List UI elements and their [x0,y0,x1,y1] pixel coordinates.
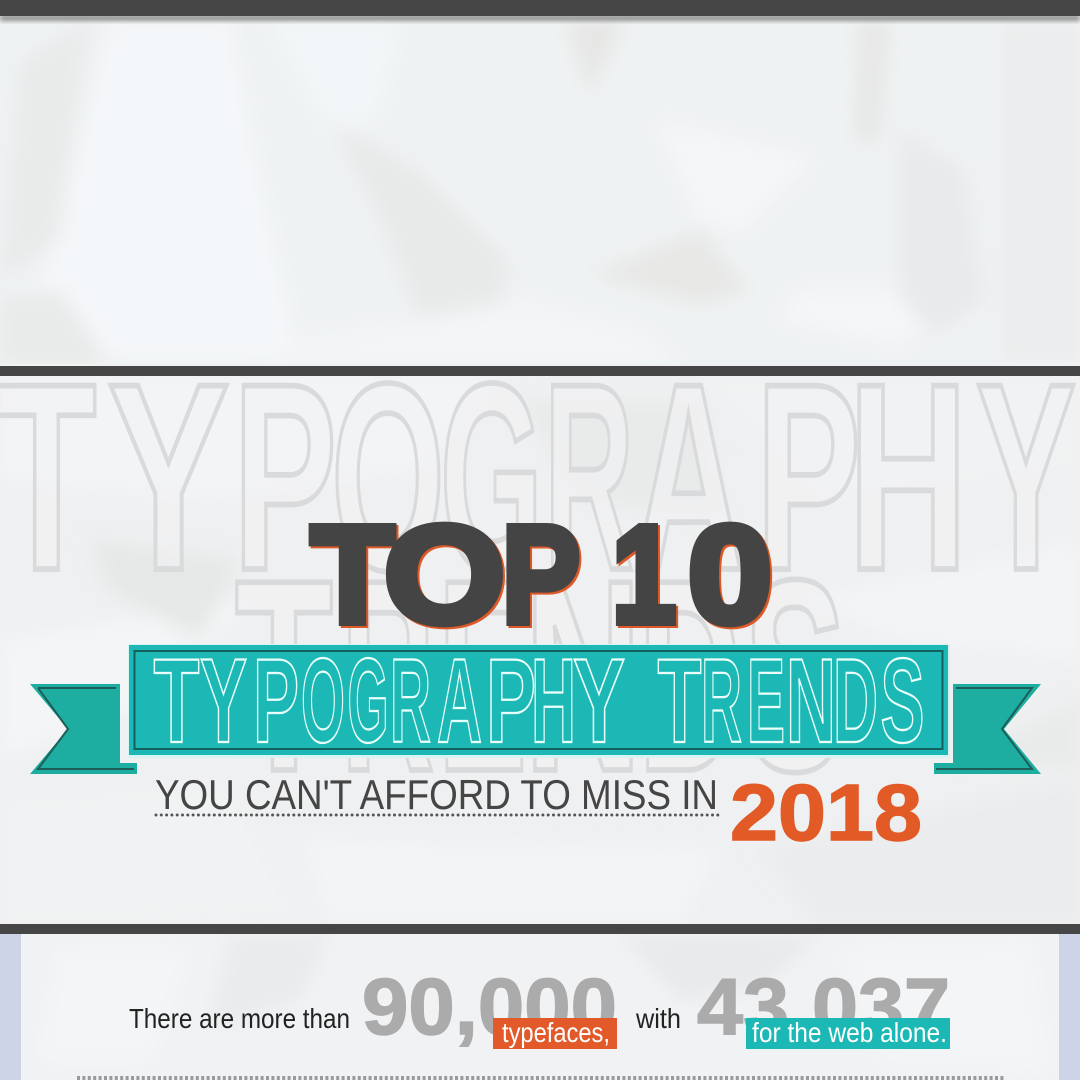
big number: 90,000: 90,000 [362,962,617,1051]
banner heading: Typography Trends: P [253,635,299,768]
banner heading: Typography Trends: S [880,635,924,768]
banner heading: Typography Trends: R [390,635,431,768]
title: TOP 10: 1 [614,500,678,654]
left lavender side strip [0,934,21,1080]
ghost background word: TYPOGRAPHY [0,329,1076,626]
ghost background word: TRENDS: S [744,524,846,829]
panel: title section background [104,549,226,623]
title: TOP 10: 0 [688,498,772,652]
ghost background word: TYPOGRAPHY: Y [976,329,1076,626]
banner heading: Typography Trends: D [833,635,878,768]
banner heading: Typography Trends: N [786,635,836,768]
title: TOP 10: T [313,500,396,654]
banner heading: Typography Trends: O [301,635,345,768]
subtitle: You can't afford to miss in: YOU CAN'T AFFORD TO MISS IN [155,771,718,818]
panel: empty crumpled paper header [574,24,883,298]
label: typefaces: typefaces, [502,1017,610,1048]
banner heading: Typography Trends: Y [573,635,625,768]
ghost background word: TYPOGRAPHY: A [633,329,744,626]
banner heading: Typography Trends: R [701,635,742,768]
banner heading: Typography Trends: E [747,635,785,768]
title: TOP 10: O [386,500,507,654]
text: with: with [635,1003,681,1034]
title: TOP 10: 1 [612,498,676,652]
lower divider bar [0,924,1080,934]
ghost background word: TYPOGRAPHY: G [440,329,543,626]
banner heading: Typography Trends: T [658,635,701,768]
statistic sentence: typefaces [129,962,950,1051]
ghost background word: TRENDS [235,524,846,829]
ribbon tail: right [934,684,1041,774]
banner heading: Typography Trends: A [437,635,482,768]
top divider bar [0,0,1080,21]
title: TOP 10: O [384,498,505,652]
banner heading: Typography Trends: P [486,635,536,768]
title: TOP 10: T [311,498,394,652]
ghost background word: TYPOGRAPHY: O [331,329,445,626]
banner: teal title box [128,635,950,768]
title: TOP 10: P [504,500,582,654]
ghost background word: TRENDS: N [524,524,642,829]
panel: statistic section background [20,934,1060,1080]
title: TOP 10: 0 [690,500,774,654]
middle divider bar [0,366,1080,376]
banner heading: Typography Trends: H [531,635,576,768]
banner heading: Typography Trends: Y [200,635,247,768]
ghost background word: TRENDS: D [638,524,742,829]
ghost background word: TYPOGRAPHY: R [544,329,634,626]
ribbon tail: left [30,684,137,774]
year: 2018: 2018 [730,768,922,857]
ghost background word: TRENDS: T [235,524,333,829]
right lavender side strip [1059,934,1080,1080]
title: TOP 10 [311,498,774,654]
ghost background word: TRENDS: E [438,524,527,829]
title: TOP 10: P [502,498,580,652]
ghost background word: TYPOGRAPHY: Y [107,329,229,626]
banner heading: Typography Trends: G [347,635,388,768]
banner heading: Typography Trends: T [154,635,199,768]
big number: 43,037: 43,037 [697,962,950,1051]
text: there are more than: There are more than [129,1003,350,1034]
banner heading: Typography Trends [154,635,924,768]
ghost background word: TYPOGRAPHY: P [756,329,861,626]
dotted divider [77,1076,1005,1080]
ghost background word: TRENDS: R [341,524,434,829]
label: for the web alone: for the web alone. [752,1017,947,1048]
ghost background word: TYPOGRAPHY: P [233,329,337,626]
ghost background word: TYPOGRAPHY: H [848,329,968,626]
